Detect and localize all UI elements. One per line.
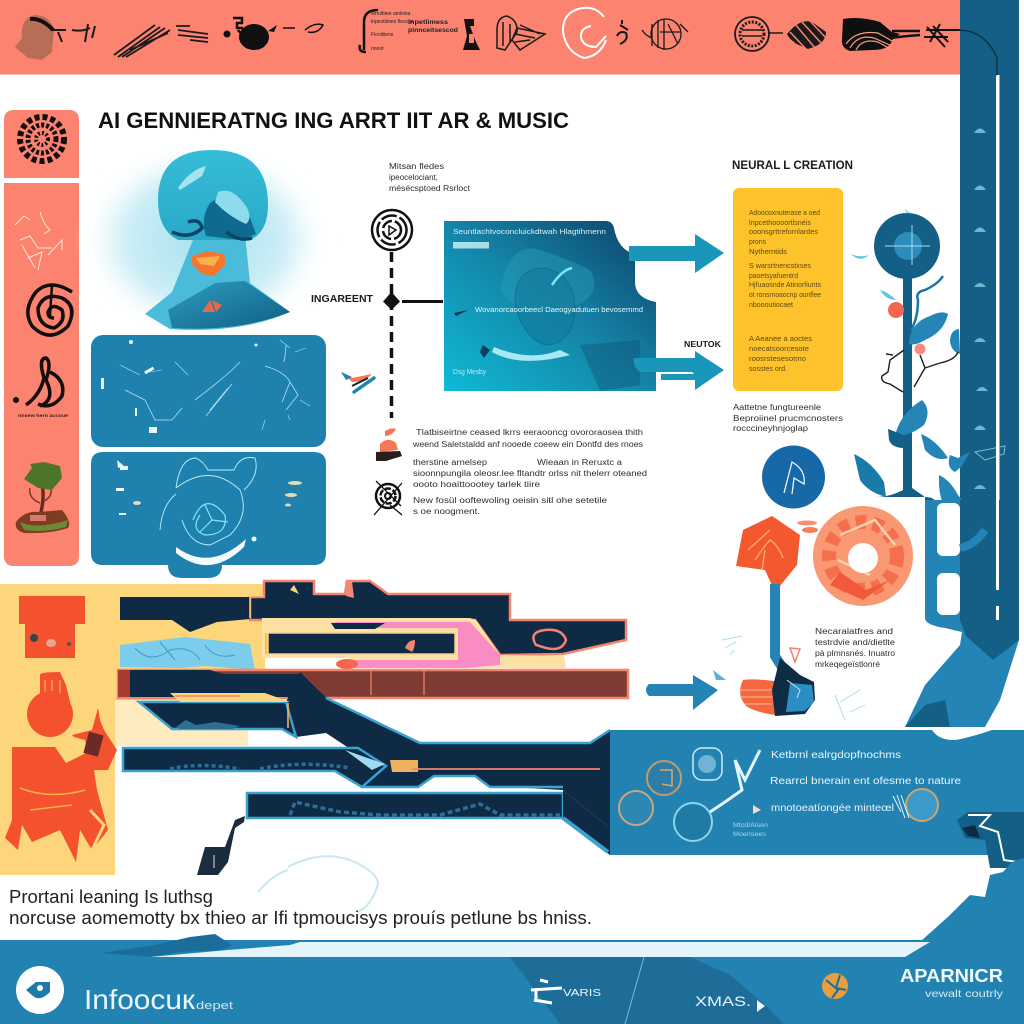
icon: red llama figure	[5, 708, 117, 862]
text: card footnote: Beproiinel prucmcnosters	[733, 414, 843, 423]
text: takeaway sentence: Prortani leaning Is luthsg	[9, 887, 213, 907]
top band icon: small glyph figure	[617, 20, 628, 44]
icon: small bird	[341, 372, 374, 392]
decorative markers: column dots	[974, 128, 988, 489]
top band icon: striped black swoosh	[842, 18, 997, 75]
panel: footer info panel: Mtcd/Alsen	[733, 823, 768, 829]
chart: blue outlined bar five	[123, 748, 600, 787]
panel: yellow text card: S warsrtnencstxses	[749, 261, 811, 270]
label: neutok: NEUTOK	[684, 339, 722, 349]
text: machine notes: pà plmnsnés. Inuatro	[815, 649, 896, 658]
icon: labyrinth node	[372, 210, 412, 250]
icon: layered stack	[376, 428, 402, 461]
decorative corner: dark fragments	[930, 727, 1024, 868]
panel: footer info panel	[610, 730, 1024, 855]
text: card footnote	[733, 403, 843, 433]
icon: white scribble	[15, 212, 62, 270]
panel: yellow text card: sosstes ord.	[749, 364, 787, 373]
top band icon: text chart: Inpetlimess	[408, 19, 448, 26]
chart: blue outlined bar four	[139, 693, 296, 737]
decorative arc: pale outline	[258, 856, 378, 912]
particles: pale blue flecks	[713, 636, 865, 720]
text: footer xms	[695, 993, 765, 1012]
icon: black clef	[13, 358, 63, 406]
text: footer right brand: APARNICR	[900, 966, 1003, 986]
panel: blue particle panel	[91, 335, 326, 447]
column slit	[996, 76, 999, 620]
chart: water texture	[120, 637, 255, 670]
illustration: swirling form	[454, 248, 640, 391]
top band icon: hatched blob	[787, 21, 826, 49]
top coral banner	[0, 0, 960, 74]
panel: footer info panel: mnotoeatíongée minteœl	[771, 802, 894, 814]
chart: blue outlined bar six	[247, 790, 610, 855]
text: footer right brand	[900, 966, 1003, 1000]
text: process notes: oooto hoaittoootey tarlek tiire	[413, 480, 541, 489]
illustration: neural tree	[851, 209, 1005, 540]
text: card footnote: rocccineyhnjoglap	[733, 424, 809, 433]
text: machine notes	[815, 627, 896, 669]
text: machine notes: Necaralatfres and	[815, 627, 893, 636]
footer band	[0, 934, 1024, 1024]
panel: feature image	[444, 221, 656, 391]
panel: yellow text card	[733, 188, 843, 391]
panel: yellow text card: ot ronsrnoaocnp ounflee	[749, 290, 821, 299]
chart: maroon bar	[118, 670, 628, 698]
panel: yellow text card: roosrstesesotmo	[749, 354, 806, 363]
chart: dark tail connector	[197, 816, 245, 875]
top band icon: round sketch	[642, 19, 688, 50]
text: icon caption: nnsew hern accoue	[18, 413, 68, 419]
panel: yellow text card: noecatsoorcesote	[749, 344, 809, 353]
text: top annotation: mésécsptoed Rsrloct	[389, 184, 471, 193]
illustration: bubbles	[619, 748, 938, 841]
heading: neural creation: NEURAL L CREATION	[732, 160, 853, 172]
top band icon: stamp circle	[735, 17, 783, 51]
connector: orange to blob	[775, 584, 790, 680]
text: footer brand	[84, 984, 233, 1015]
arrow: bars to machine	[646, 675, 718, 710]
text: top annotation: ipeocelociant,	[389, 173, 438, 182]
top band icon: text chart: Mnolbtee amleioa	[371, 11, 411, 17]
chart: circuit bar one	[120, 581, 626, 655]
panel: left coral icon strip top	[4, 110, 79, 178]
text: footer brand: Infoocuк	[84, 984, 196, 1015]
icon: coral donut	[813, 506, 913, 606]
top band icon: text chart: lnpeotiimes fleocoa	[371, 19, 414, 25]
panel: yellow side panel	[0, 584, 265, 875]
panel: left coral icon strip	[4, 183, 79, 566]
panel: blue rose panel	[91, 452, 326, 578]
text: takeaway sentence	[9, 887, 592, 928]
heading: AI GENNIERATNG ING ARRT IIT AR & MUSIC	[98, 108, 569, 133]
icon: blue medallion	[762, 446, 825, 508]
text: image captions: Seuntlachtvoconcluickdtwah Hlagtihmenn	[453, 227, 606, 236]
icon: dark rosette	[20, 117, 64, 161]
panel: yellow text card: Nythemtids	[749, 247, 787, 256]
label: ingareent node	[311, 292, 443, 310]
arrow: to neural creation	[629, 234, 724, 273]
top band icon: white swirl	[563, 8, 606, 58]
panel: yellow text card: A Aeanee a aoctes	[749, 334, 812, 343]
panel: yellow text card: prons	[749, 237, 766, 246]
right wedge edge	[921, 858, 1024, 945]
arrow: lower output	[634, 351, 724, 390]
top band icon: black blob with marks	[224, 18, 323, 50]
chart: pink inset bar	[262, 618, 566, 669]
icon: footer logo	[16, 966, 64, 1014]
text: process notes: Wieaan in Reruxtc a	[537, 458, 623, 467]
top band icon: text chart	[360, 10, 458, 52]
top band icon: text chart: nnoot	[371, 46, 384, 52]
right dark column	[960, 0, 1019, 640]
text: footer right brand: vewalt coutrly	[925, 989, 1003, 1000]
text: process notes: s oe noogment.	[413, 507, 480, 516]
text: process notes: weend Saletstaldd anf nooede coeew ein Dontfd des rnoes	[412, 440, 643, 449]
text: machine notes: testrdvie and/dietlte	[815, 638, 896, 647]
panel: yellow text card: paoetsyafuentrd	[749, 271, 798, 280]
panel: feature image: Dsg Mesby	[453, 369, 486, 376]
illustration: blue head	[80, 142, 330, 338]
text: footer varis	[531, 980, 601, 1003]
text: footer xms: XMAS.	[695, 993, 751, 1009]
text: top annotation: Mitsan fledes	[389, 162, 444, 171]
connector: dashed timeline	[390, 252, 393, 418]
text: process notes: therstine arnelsep	[413, 458, 488, 467]
text: machine notes: mrkeqegeïstlonré	[815, 660, 881, 669]
panel: feature image: Wovanorcaoorbeecl Daeogyadutuen bevosemmd	[475, 307, 643, 314]
panel: footer info panel: Rearrcl bnerain ent ofesme to nature	[770, 775, 961, 787]
panel: yellow text card: nboooutiocaet	[749, 300, 794, 309]
text: process notes	[412, 428, 647, 516]
text: takeaway sentence: norcuse aomemotty bx thieo ar Ifi tpmoucisys prouís petlune bs hniss.	[9, 908, 592, 928]
text: card footnote: Aattetne fungtureenle	[733, 403, 822, 412]
icon: red lantern	[27, 672, 73, 737]
panel: footer info panel: Moensees	[733, 832, 766, 838]
panel: yellow text card: Adoocoxnuterase a oed	[749, 208, 820, 217]
icon: machine blob	[740, 658, 815, 716]
top band icon: pot	[15, 15, 95, 60]
text: footer varis: VARIS	[563, 988, 601, 999]
text: process notes: sioonnpungila oleosr.lee fltandtr orlss nit thelerr oteaned	[413, 469, 647, 478]
text: info lines: Ketbrnl ealrgdopfnochms	[771, 749, 901, 761]
icon: bonsai tree	[16, 462, 69, 533]
icon: orange polygon	[736, 516, 818, 592]
icon: crossed labyrinth	[374, 481, 402, 515]
chart: diagonal connector	[286, 672, 610, 828]
icon: black spiral	[28, 285, 72, 335]
icon: sketch marker	[790, 648, 800, 662]
top band icon: small figure	[463, 19, 480, 50]
text: footer brand: depet	[196, 1000, 233, 1012]
panel: yellow text card: Hjfuaosnde Atinorfiunts	[749, 280, 821, 289]
panel: yellow text card: lnpcethoooortlsnéis	[749, 218, 811, 227]
top band icon: text chart: pinnceitsescod	[408, 27, 458, 34]
icon: orange globe	[822, 973, 848, 999]
top band icon: diagonal stripes	[114, 25, 208, 57]
label: ingareent node: INGAREENT	[311, 294, 373, 305]
panel: yellow text card: ooonsgrttrefornlardes	[749, 227, 818, 236]
illustration: lower machinery	[905, 500, 1019, 727]
top band icon: text chart: Fiooiiiiens	[371, 32, 394, 38]
icon: red block	[19, 596, 85, 658]
text: process notes: Tlatbiseirtne ceased lkrrs eeraooncg ovororaosea thith	[416, 428, 643, 437]
text: process notes: New fosül ooftewoling oeisin sitl ohe setetile	[413, 496, 608, 505]
text: top annotation	[389, 162, 471, 193]
top band icon: hatched book	[497, 16, 545, 50]
